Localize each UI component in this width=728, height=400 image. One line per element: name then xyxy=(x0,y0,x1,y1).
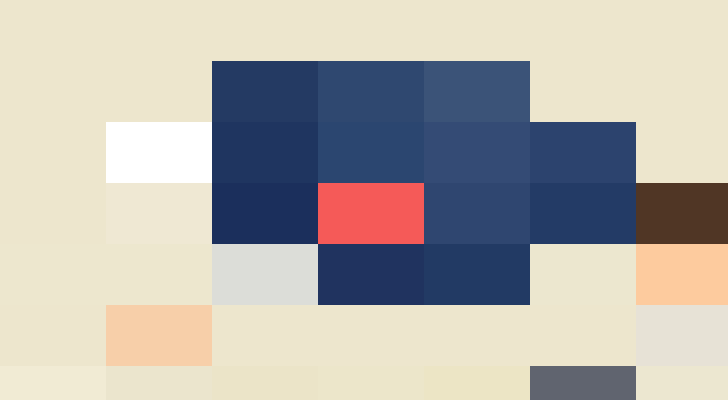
row 2: white block and navy blocks xyxy=(106,122,636,183)
row 1: figure top xyxy=(212,61,530,122)
row 6: bottom strip with slate block xyxy=(530,366,636,400)
row 5: peach and pale blocks xyxy=(106,305,728,366)
row 3: red block and brown block xyxy=(212,183,728,244)
row 4: grey, navy and peach blocks xyxy=(212,244,728,305)
